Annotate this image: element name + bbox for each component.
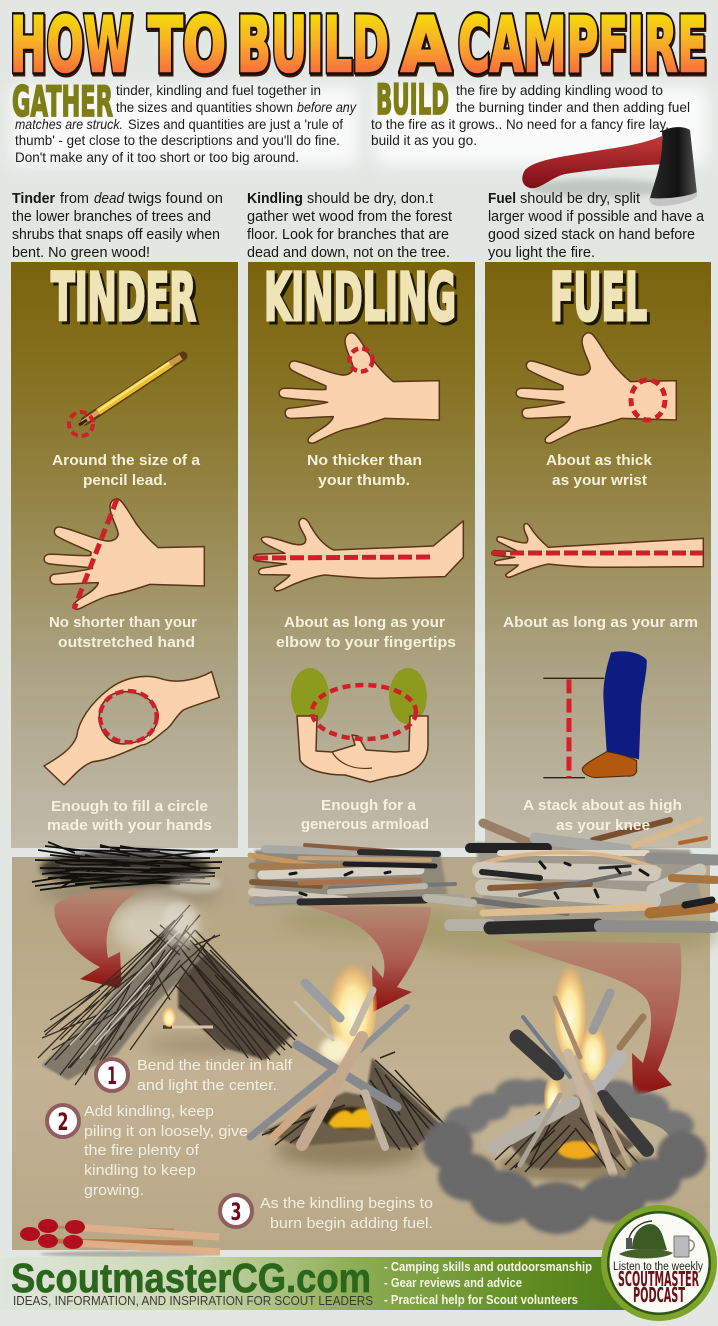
caption: elbow to fingertips: About as long as your <box>284 614 445 631</box>
caption: outstretched hand <box>49 614 197 651</box>
step 1 marker: 1 <box>107 1062 117 1090</box>
gather text block: GATHER <box>12 77 113 126</box>
paragraph: tinder: Tinder <box>12 190 55 207</box>
step 1 marker <box>96 1059 128 1091</box>
caption: pencil lead: Around the size of a <box>52 452 201 469</box>
step 3 marker <box>220 1195 252 1227</box>
bent tinder with match <box>38 901 297 1085</box>
gather text block: Don't make any of it too short or too big around. <box>15 149 299 165</box>
build text block: to the fire as it grows.. No need for a fancy fire lay, <box>371 116 669 132</box>
title: TO <box>148 0 226 89</box>
badge text <box>613 1261 703 1307</box>
icon: campaign hat and mug <box>619 1221 694 1258</box>
logo: website name: ScoutmasterCG.com <box>11 1255 371 1301</box>
icon: hands making a circle <box>44 672 219 785</box>
paragraph: kindling <box>247 190 453 261</box>
build text block: BUILD <box>376 75 449 124</box>
paragraph: kindling: should be dry, don.t <box>307 190 434 207</box>
paragraph: tinder: the lower branches of trees and <box>12 208 211 225</box>
caption: elbow to fingertips <box>276 614 456 651</box>
paragraph: kindling: Kindling <box>247 190 303 207</box>
icon: armload <box>291 668 428 782</box>
tagline: IDEAS, INFORMATION, AND INSPIRATION FOR SCOUT LEADERS <box>13 1293 373 1308</box>
paragraph: fuel: you light the fire. <box>488 244 595 261</box>
caption: knee stack: A stack about as high <box>523 797 682 814</box>
panel: fuel <box>485 259 711 848</box>
step 2 text: Add kindling, keep <box>84 1103 214 1120</box>
step 2 marker <box>47 1105 79 1137</box>
panel: kindling <box>248 259 475 848</box>
paragraph: tinder: shrubs that snaps off easily when <box>12 226 220 243</box>
step 2 text <box>84 1103 248 1199</box>
step 2 text: kindling to keep <box>84 1162 196 1179</box>
paragraph: kindling: gather wet wood from the forest <box>247 208 453 225</box>
step 2 text: growing. <box>84 1182 144 1199</box>
caption: wrist: About as thick <box>546 452 653 469</box>
title: A <box>401 0 451 89</box>
caption: hands circle: made with your hands <box>47 817 212 834</box>
step 2 marker: 2 <box>58 1108 68 1136</box>
badge: podcast <box>601 1205 717 1321</box>
bullet list: - Camping skills and outdoorsmanship <box>384 1260 592 1274</box>
panel: bottom fire building scene <box>12 797 718 1257</box>
caption: knee stack <box>523 797 682 834</box>
white glow behind intro text <box>12 88 706 164</box>
title <box>10 0 707 89</box>
gather text block: thumb' - get close to the descriptions and you'll do fine. <box>15 132 340 148</box>
banner: footer <box>0 1255 640 1310</box>
title: BUILD <box>237 0 389 89</box>
bullet list: - Practical help for Scout volunteers <box>384 1293 578 1307</box>
heading: kindling: KINDLING <box>264 259 456 336</box>
title: HOW <box>10 0 132 89</box>
fuel stack <box>427 820 716 932</box>
caption: armload: generous armload <box>301 816 429 833</box>
campfire with kindling <box>250 957 445 1150</box>
caption: hands circle <box>47 798 212 834</box>
caption: armload: Enough for a <box>321 797 417 814</box>
arrow: kindling to fire <box>303 905 431 1012</box>
arrow: fuel to fire <box>503 940 681 1097</box>
gather text block: the sizes and quantities shown <box>116 99 293 115</box>
caption: pencil lead <box>52 452 201 489</box>
icon: axe <box>522 127 697 206</box>
bullet list: - Gear reviews and advice <box>384 1276 522 1290</box>
title: HOW <box>10 0 132 89</box>
title: BUILD <box>237 0 389 89</box>
gather text block: tinder, kindling and fuel together in <box>116 82 321 98</box>
gather text block: before any <box>297 99 357 115</box>
build text block: build it as you go. <box>371 132 477 148</box>
bullet list <box>384 1260 592 1307</box>
matches <box>20 1219 220 1257</box>
kindling stack <box>250 845 462 906</box>
step 3 text <box>260 1195 433 1232</box>
tinder bundle <box>32 842 222 893</box>
paragraph: fuel <box>488 190 705 261</box>
title: TO <box>148 0 226 89</box>
paragraph: tinder: from <box>60 190 89 207</box>
caption: wrist: as your wrist <box>552 472 647 489</box>
paragraph: fuel: Fuel <box>488 190 516 207</box>
caption: outstretched hand: outstretched hand <box>58 634 195 651</box>
step 3 text: burn begin adding fuel. <box>270 1215 433 1232</box>
caption: thumb <box>307 452 422 489</box>
gather text block: matches are struck. <box>15 116 123 132</box>
caption: elbow to fingertips: elbow to your fingertips <box>276 634 456 651</box>
paragraph: fuel: larger wood if possible and have a <box>488 208 705 225</box>
caption: wrist <box>546 452 653 489</box>
panel: tinder <box>11 259 238 848</box>
icon: hand with circled thumb <box>279 333 439 443</box>
caption: armload <box>301 797 429 833</box>
step 2 text: piling it on loosely, give <box>84 1123 248 1140</box>
step 1 text: Bend the tinder in half <box>137 1057 293 1074</box>
icon: pencil with circled lead <box>69 356 183 436</box>
icon: full arm with dashed line <box>492 524 703 577</box>
icon: outstretched hand with span line <box>44 499 204 609</box>
caption: hands circle: Enough to fill a circle <box>51 798 208 815</box>
shading: scene glows and shadows <box>40 879 718 1168</box>
build text block <box>371 75 690 148</box>
step 1 text: and light the center. <box>137 1077 277 1094</box>
campfire with fuel and stone ring <box>423 958 707 1234</box>
paragraph: fuel: should be dry, split <box>520 190 641 207</box>
build text block: the burning tinder and then adding fuel <box>456 99 690 115</box>
caption: thumb: your thumb. <box>318 472 410 489</box>
gather text block <box>12 77 357 165</box>
paragraph: kindling: dead and down, not on the tree. <box>247 244 450 261</box>
paragraph: kindling: floor. Look for branches that are <box>247 226 449 243</box>
step 2 text: the fire plenty of <box>84 1142 200 1159</box>
build text block: the fire by adding kindling wood to <box>456 82 663 98</box>
step 3 marker: 3 <box>230 1198 242 1226</box>
arrow: tinder bend <box>54 890 140 989</box>
caption: arm: About as long as your arm <box>503 614 698 631</box>
paragraph: tinder: dead <box>94 190 125 207</box>
icon: forearm with dashed line <box>253 518 463 591</box>
step 1 text <box>137 1057 293 1094</box>
gather text block: Sizes and quantities are just a 'rule of <box>128 116 343 132</box>
title: A <box>401 0 451 89</box>
caption: knee stack: as your knee <box>556 817 650 834</box>
caption: pencil lead: pencil lead. <box>83 472 167 489</box>
icon: hand with circled wrist <box>516 333 676 443</box>
caption: outstretched hand: No shorter than your <box>49 614 197 631</box>
icon: leg and boot with knee height <box>543 651 647 778</box>
paragraph: tinder: twigs found on <box>128 190 223 207</box>
paragraph: fuel: good sized stack on hand before <box>488 226 695 243</box>
badge text: Listen to the weekly <box>613 1261 703 1273</box>
paragraph: tinder: bent. No green wood! <box>12 244 150 261</box>
paragraph: tinder <box>12 190 223 261</box>
caption: thumb: No thicker than <box>307 452 422 469</box>
heading: tinder: TINDER <box>51 259 196 336</box>
step 3 text: As the kindling begins to <box>260 1195 433 1212</box>
